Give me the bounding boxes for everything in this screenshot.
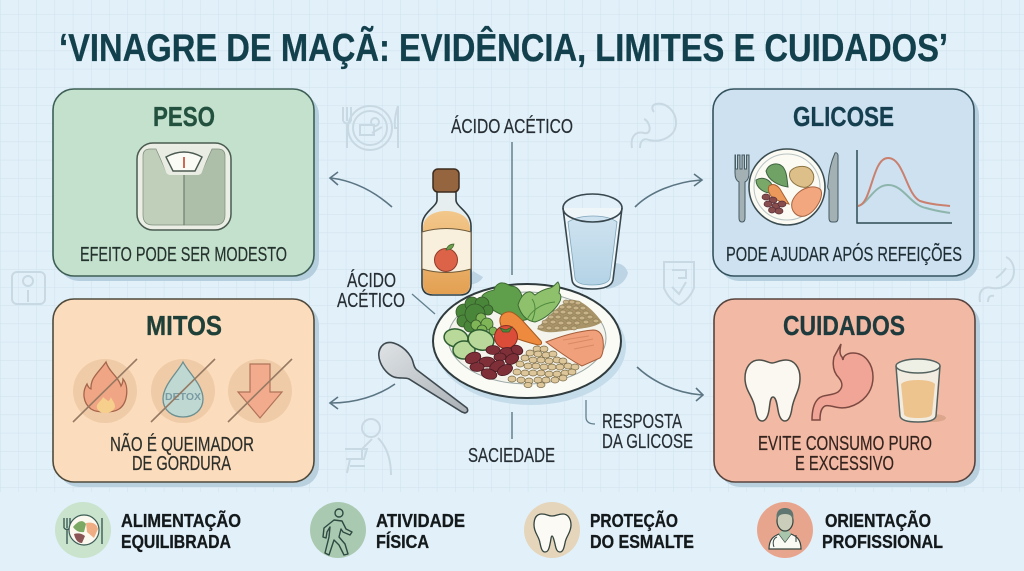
panel: cuidados — [714, 299, 980, 487]
caption: cuidados — [758, 433, 932, 475]
icon: crossed flame — [73, 359, 137, 423]
icon: water glass — [563, 194, 628, 289]
caption: peso: EFEITO PODE SER MODESTO — [80, 244, 287, 266]
panel: mitos — [53, 299, 319, 487]
heading: peso: PESO — [153, 101, 215, 132]
leader line: ácido acético left — [412, 294, 435, 314]
tomato — [494, 326, 518, 348]
arrow: to mitos — [330, 384, 395, 409]
kidney beans — [464, 343, 524, 381]
caption: mitos — [110, 432, 254, 475]
icon: stomach — [812, 344, 873, 420]
legend item: alimentação equilibrada: EQUILIBRADA — [121, 532, 231, 552]
carrot — [500, 312, 542, 345]
caption: mitos: DE GORDURA — [132, 453, 231, 475]
legend item: alimentação equilibrada: ALIMENTAÇÃO — [121, 510, 241, 531]
heading: cuidados: CUIDADOS — [783, 310, 905, 341]
label: ácido acético left: ÁCIDO — [347, 269, 396, 292]
label: saciedade: SACIEDADE — [468, 445, 555, 467]
caption: mitos: NÃO É QUEIMADOR — [110, 432, 254, 456]
broccoli — [456, 297, 497, 335]
panel: glicose — [713, 89, 979, 281]
legend item: atividade física: FÍSICA — [376, 531, 429, 552]
leader line: ácido acético top — [511, 142, 513, 275]
icon: vinegar glass — [896, 359, 946, 422]
icon: tooth — [745, 360, 800, 421]
panel: peso — [53, 89, 319, 281]
arrow: to cuidados — [637, 367, 703, 401]
label: ácido acético top: ÁCIDO ACÉTICO — [451, 115, 573, 138]
chickpeas — [508, 346, 579, 388]
label: resposta da glicose — [602, 411, 693, 453]
salmon — [546, 330, 603, 366]
illustration: food plate — [433, 282, 626, 405]
label: resposta da glicose: DA GLICOSE — [602, 431, 693, 453]
icon: crossed down arrow — [228, 359, 292, 423]
chart: glucose response curves — [857, 150, 952, 223]
legend item: atividade física — [310, 502, 465, 558]
legend item: orientação profissional: ORIENTAÇÃO — [825, 510, 931, 531]
lettuce — [482, 282, 561, 322]
icon: vinegar bottle — [422, 169, 483, 295]
label: resposta da glicose: RESPOSTA — [602, 411, 682, 433]
background icon: small scale — [12, 272, 45, 304]
leader line: resposta da glicose — [586, 400, 595, 424]
legend item: orientação profissional — [757, 502, 943, 558]
heading: glicose: GLICOSE — [793, 101, 894, 132]
legend item: proteção do esmalte: DO ESMALTE — [590, 532, 694, 552]
grains — [537, 300, 602, 332]
icon: crossed detox drop: DETOX — [165, 392, 201, 403]
icon: meal plate — [749, 149, 825, 225]
arrow: to peso — [330, 172, 392, 207]
background icon: seated person — [345, 419, 391, 475]
background icon: plate and cutlery — [343, 106, 398, 150]
arrow: to glicose — [635, 174, 702, 207]
leader line: saciedade — [511, 412, 513, 439]
background icon: stomach — [632, 104, 676, 148]
icon: bathroom scale — [137, 143, 231, 230]
label: ácido acético left: ACÉTICO — [337, 289, 405, 312]
legend item: atividade física: ATIVIDADE — [376, 511, 465, 531]
legend item: proteção do esmalte: PROTEÇÃO — [590, 510, 678, 531]
icon: spoon — [379, 342, 468, 413]
legend item: proteção do esmalte — [524, 502, 694, 558]
label: ácido acético left — [337, 269, 405, 312]
cucumbers — [443, 327, 496, 359]
background icon: shield tooth — [664, 262, 694, 305]
icon: knife — [828, 153, 838, 222]
background icon: stomach right — [980, 257, 1014, 302]
legend item: orientação profissional: PROFISSIONAL — [822, 532, 943, 552]
legend item: alimentação equilibrada — [55, 502, 241, 558]
caption: cuidados: E EXCESSIVO — [795, 453, 894, 475]
caption: cuidados: EVITE CONSUMO PURO — [758, 433, 932, 455]
heading: mitos: MITOS — [146, 310, 222, 341]
icon: fork — [735, 155, 749, 222]
icon: crossed detox drop — [151, 359, 215, 423]
